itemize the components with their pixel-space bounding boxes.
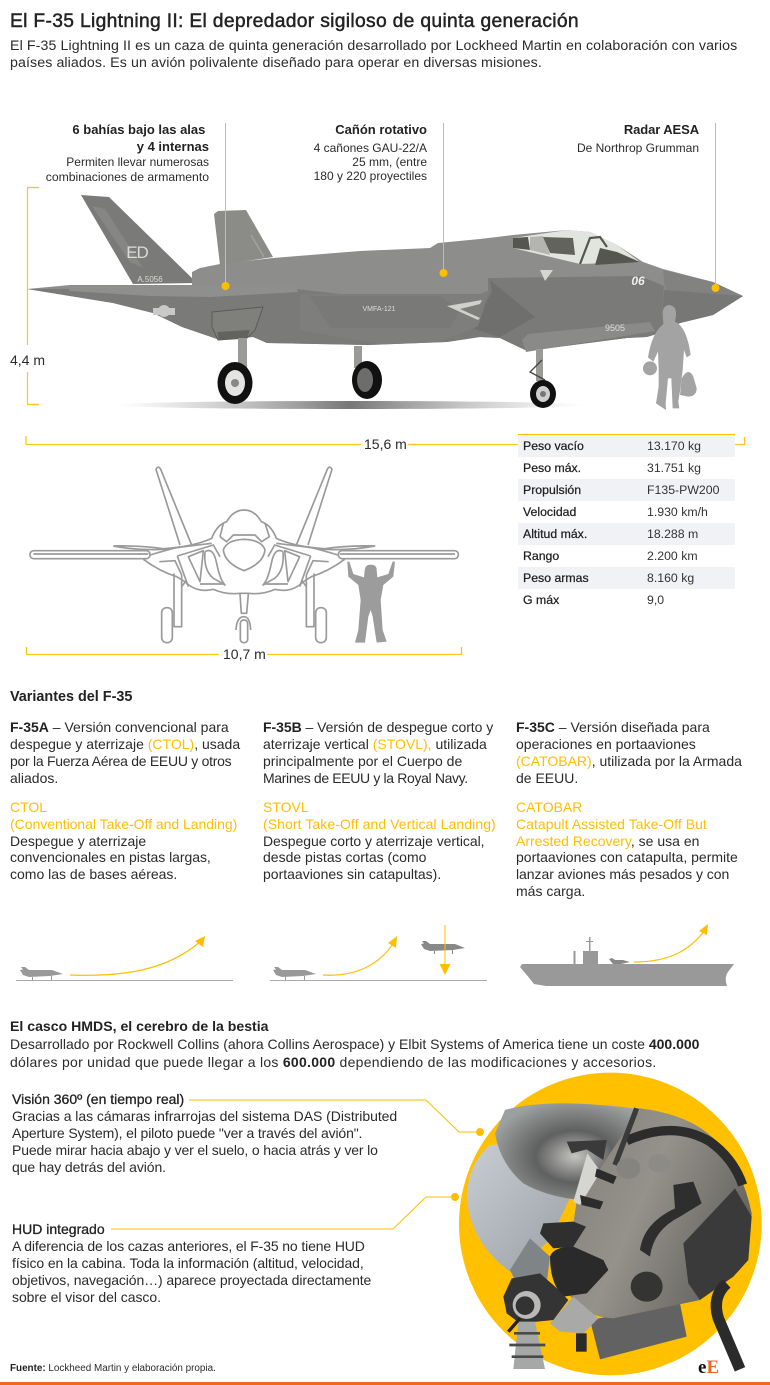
- spec table: 2.200 km: [647, 549, 698, 563]
- side view jet: ED: [126, 243, 149, 262]
- variant F-35B: F-35B – Versión de despegue corto y: [263, 719, 493, 735]
- variant F-35A: por la Fuerza Aérea de EEUU y otros: [10, 753, 231, 769]
- hose: [513, 1322, 545, 1369]
- variant F-35C: F-35C – Versión diseñada para: [516, 719, 710, 735]
- length bracket: [26, 436, 744, 444]
- fuselage upper: [27, 230, 743, 350]
- side view jet: A.5056: [137, 275, 163, 284]
- text: visión 360: que hay detrás del avión.: [12, 1159, 166, 1175]
- callout: cañón: Cañón rotativo: [335, 122, 427, 137]
- side view jet: 06: [631, 274, 645, 288]
- callout: radar: [577, 122, 699, 155]
- spec table: 13.170 kg: [647, 439, 701, 453]
- variant F-35A: (Conventional Take-Off and Landing): [10, 816, 237, 832]
- canopy: [513, 230, 640, 264]
- marshaller silhouette: [347, 562, 395, 643]
- landing gear: [238, 338, 247, 368]
- yellow circle: [459, 1073, 762, 1375]
- variant F-35C: portaaviones con catapulta, permite: [516, 849, 738, 865]
- callout: radar: De Northrop Grumman: [577, 141, 699, 155]
- spec table: Altitud máx.: [523, 527, 587, 541]
- weapon bay bulge: [522, 322, 655, 352]
- visor hinge: [567, 1140, 607, 1160]
- engine intake: [212, 307, 263, 340]
- CTOL diagram: [16, 936, 233, 981]
- front view jet: [30, 467, 458, 643]
- variant F-35B: aterrizaje vertical (STOVL), utilizada: [263, 736, 487, 752]
- text: visión 360: Puede mirar hacia abajo y ver el suelo, o hacia atrás y ver lo: [12, 1142, 378, 1158]
- upper visor: [495, 1103, 640, 1200]
- main fin: [81, 195, 197, 284]
- text: HUD integrado: [12, 1221, 371, 1305]
- clear visor: [467, 1142, 583, 1273]
- bottom rule: [0, 1382, 770, 1385]
- variant F-35A: despegue y aterrizaje (CTOL), usada: [10, 736, 240, 752]
- cable harness: [627, 1131, 743, 1185]
- microphone unit: [550, 1247, 608, 1297]
- CATOBAR diagram: [520, 924, 734, 986]
- variant F-35A: Despegue y aterrizaje: [10, 832, 146, 848]
- callout: bahías: [46, 122, 209, 184]
- callout: bahías: y 4 internas: [137, 139, 209, 154]
- variant F-35B: (Short Take-Off and Vertical Landing): [263, 816, 496, 832]
- spec table: 9,0: [647, 593, 664, 607]
- helmet illustration: [459, 1073, 762, 1375]
- variant F-35A: aliados.: [10, 770, 58, 786]
- rear fin: [214, 210, 273, 265]
- variant F-35C: Arrested Recovery, se usa en: [516, 832, 699, 848]
- variant F-35C: lanzar aviones más pesados y con: [516, 866, 729, 882]
- variant F-35B: STOVL: [263, 799, 309, 815]
- text: HUD integrado: físico en la cabina. Toda la información (altitud, velocidad,: [12, 1255, 364, 1271]
- callout: cañón: 25 mm, (entre: [352, 155, 427, 169]
- nose: [660, 270, 743, 333]
- leader line: cañón: [440, 123, 448, 277]
- callout: radar: Radar AESA: [624, 122, 699, 137]
- callout: cañón: 180 y 220 proyectiles: [314, 169, 427, 183]
- fuselage outline: [113, 510, 375, 550]
- text: visión 360: Visión 360º (en tiempo real): [12, 1091, 184, 1107]
- side view jet: [27, 195, 743, 409]
- rear pad: [683, 1188, 752, 1300]
- intro text: países aliados. Es un avión polivalente diseñado para operar en diversas misiones.: [10, 55, 542, 71]
- spec table: Velocidad: [523, 505, 576, 519]
- text: HUD integrado: objetivos, navegación…) aparece proyectada directamente: [12, 1272, 371, 1288]
- spec table: Peso vacío: [523, 439, 584, 453]
- variant F-35A: CTOL: [10, 799, 47, 815]
- callout: cañón: 4 cañones GAU-22/A: [314, 141, 427, 155]
- studs: [616, 1158, 640, 1179]
- HMDS intro: Desarrollado por Rockwell Collins (ahora Collins Aerospace) y Elbit Systems of America tiene un coste 400.000: [10, 1036, 699, 1052]
- variant F-35A: como las de bases aéreas.: [10, 866, 177, 882]
- spec table: 18.288 m: [647, 527, 698, 541]
- spec table: 8.160 kg: [647, 571, 694, 585]
- callout: cañón: [314, 122, 427, 183]
- text: HUD integrado: A diferencia de los cazas anteriores, el F-35 no tiene HUD: [12, 1238, 365, 1254]
- variant F-35C: [516, 719, 742, 899]
- height bracket: [28, 188, 39, 404]
- variant F-35B: [263, 719, 496, 882]
- text: visión 360: [12, 1091, 397, 1175]
- helmet callout line 1: [189, 1100, 484, 1136]
- side knob: [631, 1272, 663, 1302]
- fins: [156, 467, 192, 545]
- side view jet: 9505: [605, 323, 625, 333]
- label: 15,6 m: 15,6 m: [364, 436, 407, 452]
- helmet callout line 2: [111, 1193, 459, 1229]
- text: visión 360: Gracias a las cámaras infrarrojas del sistema DAS (Distributed: [12, 1108, 397, 1124]
- variant F-35A: F-35A – Versión convencional para: [10, 719, 229, 735]
- variant F-35B: principalmente por el Cuerpo de: [263, 753, 462, 769]
- variant F-35C: CATOBAR: [516, 799, 582, 815]
- landing gear: [174, 573, 314, 627]
- variant F-35B: Despegue corto y aterrizaje vertical,: [263, 832, 484, 848]
- mask shield: [510, 1238, 550, 1283]
- spec table: 31.751 kg: [647, 461, 701, 475]
- spec table: 1.930 km/h: [647, 505, 708, 519]
- variant F-35B: portaaviones sin catapultas).: [263, 866, 441, 882]
- spec table: G máx: [523, 593, 559, 607]
- spec table: Peso armas: [523, 571, 589, 585]
- fuselage lower: [27, 276, 664, 350]
- wing strip: [66, 286, 298, 297]
- neck pad: [590, 1303, 687, 1359]
- callout: bahías: Permiten llevar numerosas: [66, 155, 209, 169]
- variant F-35C: de EEUU.: [516, 770, 578, 786]
- intro text: El F-35 Lightning II es un caza de quinta generación desarrollado por Lockheed Martin en colaboración con varios: [10, 38, 737, 54]
- text: HUD integrado: sobre el visor del casco.: [12, 1289, 161, 1305]
- HMDS intro: [10, 1036, 699, 1070]
- HMDS intro: dólares por unidad que puede llegar a los 600.000 dependiendo de las modificaciones y accesorios.: [10, 1054, 657, 1070]
- lower cup: [550, 1297, 598, 1333]
- markings: [540, 270, 553, 281]
- variant F-35B: Marines de EEUU y la Royal Navy.: [263, 770, 468, 786]
- wingspan bracket: [26, 647, 462, 654]
- variant F-35C: (CATOBAR), utilizada por la Armada: [516, 753, 742, 769]
- spec table: Peso máx.: [523, 461, 581, 475]
- callout: bahías: combinaciones de armamento: [46, 170, 209, 184]
- pilot silhouette: [643, 305, 697, 410]
- label: 10,7 m: 10,7 m: [223, 646, 266, 662]
- variant F-35A: [10, 719, 240, 882]
- variant F-35C: Catapult Assisted Take-Off But: [516, 816, 707, 832]
- intro text: [10, 38, 737, 71]
- spec table: Propulsión: [523, 483, 581, 497]
- STOVL diagram: [270, 925, 487, 981]
- source: Fuente: Lockheed Martin y elaboración propia.: [10, 1363, 216, 1374]
- text: HUD integrado: HUD integrado: [12, 1221, 105, 1237]
- wheels: [352, 361, 382, 399]
- logo: eE: [698, 1357, 719, 1378]
- spec table: Rango: [523, 549, 559, 563]
- helmet shell: [567, 1108, 752, 1318]
- spec table: F135-PW200: [647, 483, 719, 497]
- variant F-35A: convencionales en pistas largas,: [10, 849, 211, 865]
- back cable: [716, 1283, 740, 1369]
- label: 4,4 m: 4,4 m: [10, 352, 45, 368]
- leader line: bahías: [222, 123, 230, 290]
- heading: casco HMDS: El casco HMDS, el cerebro de la bestia: [10, 1018, 268, 1034]
- side view jet: VMFA-121: [362, 306, 396, 313]
- heading: variantes: Variantes del F-35: [10, 689, 132, 705]
- title: El F-35 Lightning II: El depredador sigiloso de quinta generación: [10, 11, 579, 32]
- spec table: [518, 434, 735, 611]
- variant F-35C: más carga.: [516, 883, 585, 899]
- wings: [30, 551, 150, 559]
- callout: bahías: 6 bahías bajo las alas: [72, 122, 205, 137]
- variant F-35C: operaciones en portaaviones: [516, 736, 696, 752]
- oxygen mask: [503, 1273, 568, 1323]
- leader line: radar: [712, 123, 720, 292]
- variant F-35B: desde pistas cortas (como: [263, 849, 426, 865]
- text: visión 360: Aperture System), el piloto puede "ver a través del avión".: [12, 1125, 362, 1141]
- ground shadow: [115, 401, 585, 409]
